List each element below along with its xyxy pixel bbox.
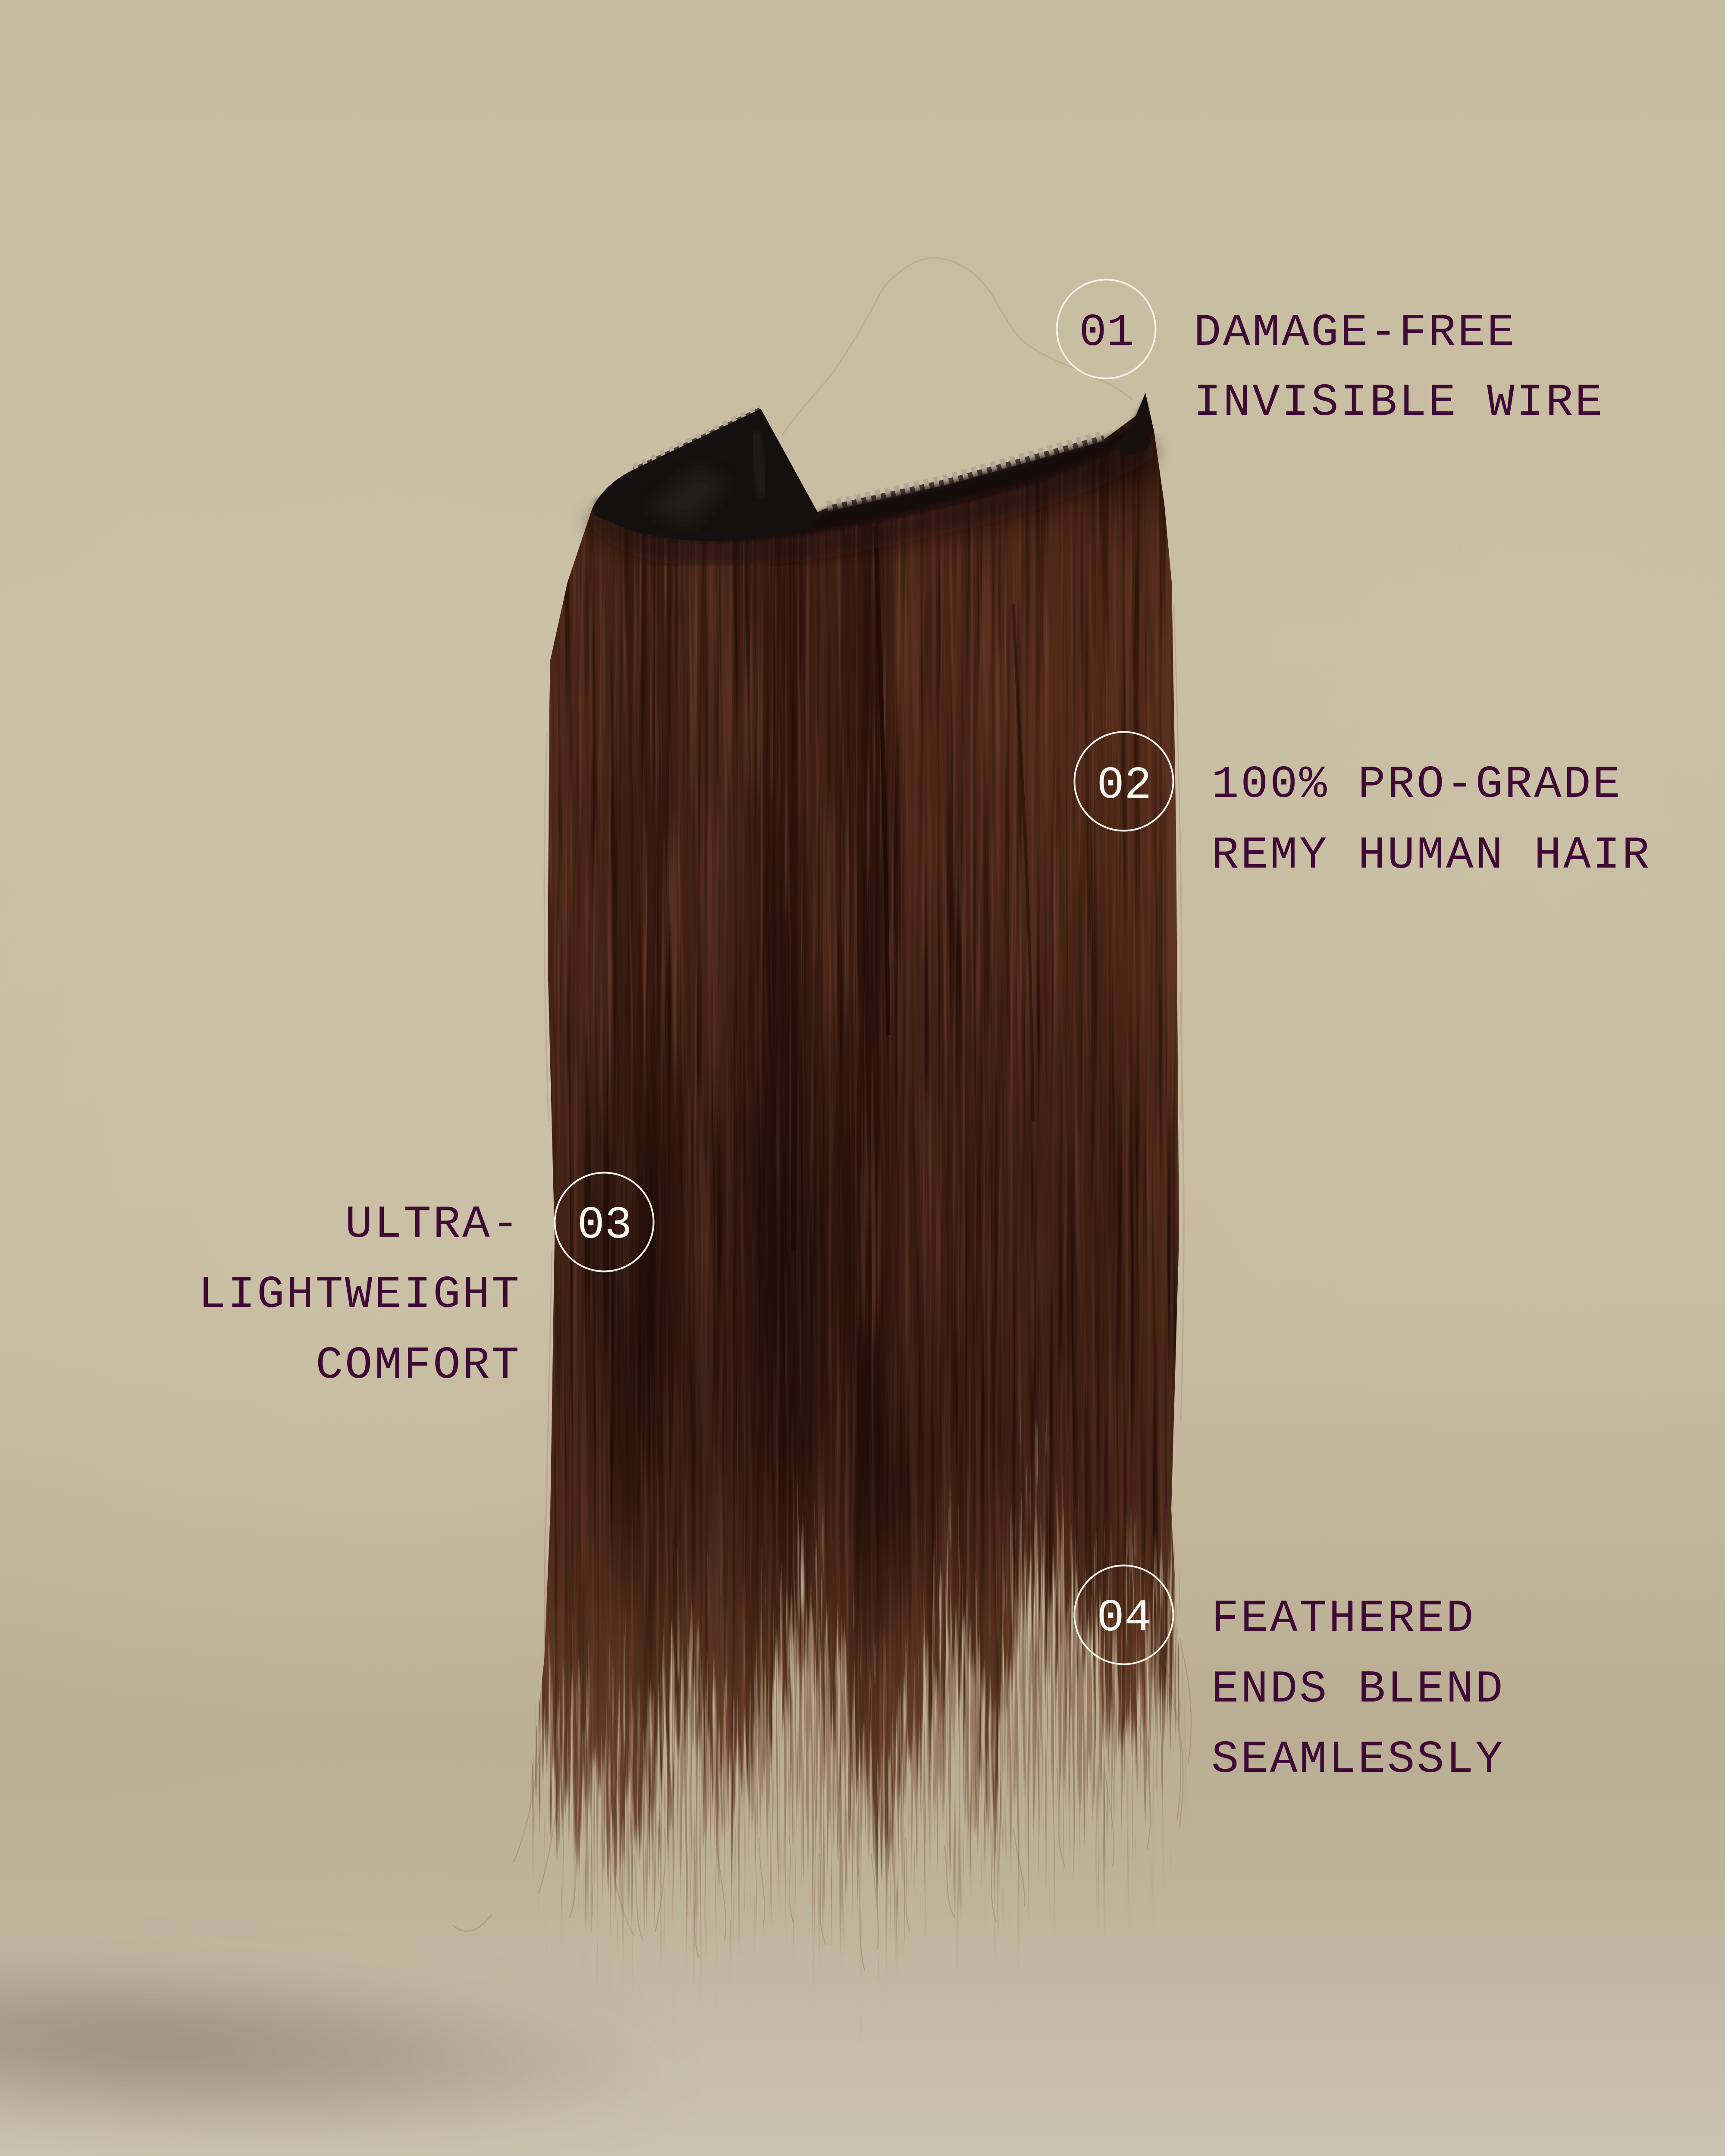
callout 01: wire: INVISIBLE WIRE [1194, 377, 1604, 429]
translucent feathered wisps [543, 1434, 1186, 1970]
callout 03: lightweight: LIGHTWEIGHT [198, 1269, 521, 1321]
callout 02: remy hair: 02 [1097, 760, 1152, 812]
invisible wire [782, 258, 1132, 435]
callout 01: wire: DAMAGE-FREE [1194, 307, 1516, 359]
comb edge, right [827, 436, 1104, 509]
black silk cap [593, 409, 818, 541]
callout 02: remy hair: REMY HUMAN HAIR [1211, 830, 1651, 881]
callout 04: feathered ends: 04 [1097, 1592, 1152, 1644]
right wire tab [1117, 393, 1154, 457]
callout 02: remy hair: 100% PRO-GRADE [1211, 759, 1622, 811]
stray feathered ends [453, 1639, 1191, 1971]
callout 04: feathered ends [1075, 1565, 1505, 1786]
callout 04: feathered ends: FEATHERED [1211, 1593, 1475, 1645]
comb edge, left [634, 408, 761, 470]
callout 03: lightweight [198, 1173, 654, 1391]
callout 04: feathered ends: SEAMLESSLY [1211, 1734, 1505, 1786]
hair extension [453, 393, 1192, 1980]
callout 03: lightweight: ULTRA- [345, 1199, 521, 1250]
floor shadow [0, 1932, 694, 2156]
hair body [496, 388, 1229, 1984]
callout 01: wire [1057, 279, 1604, 429]
side fringe hairs [544, 604, 1184, 1595]
callout 03: lightweight: 03 [577, 1200, 632, 1251]
weft band [594, 401, 1145, 542]
callout 01: wire: 01 [1079, 307, 1134, 359]
callout 04: feathered ends: ENDS BLEND [1211, 1664, 1505, 1715]
callout 02: remy hair [1075, 732, 1651, 881]
callout 03: lightweight: COMFORT [316, 1340, 521, 1391]
